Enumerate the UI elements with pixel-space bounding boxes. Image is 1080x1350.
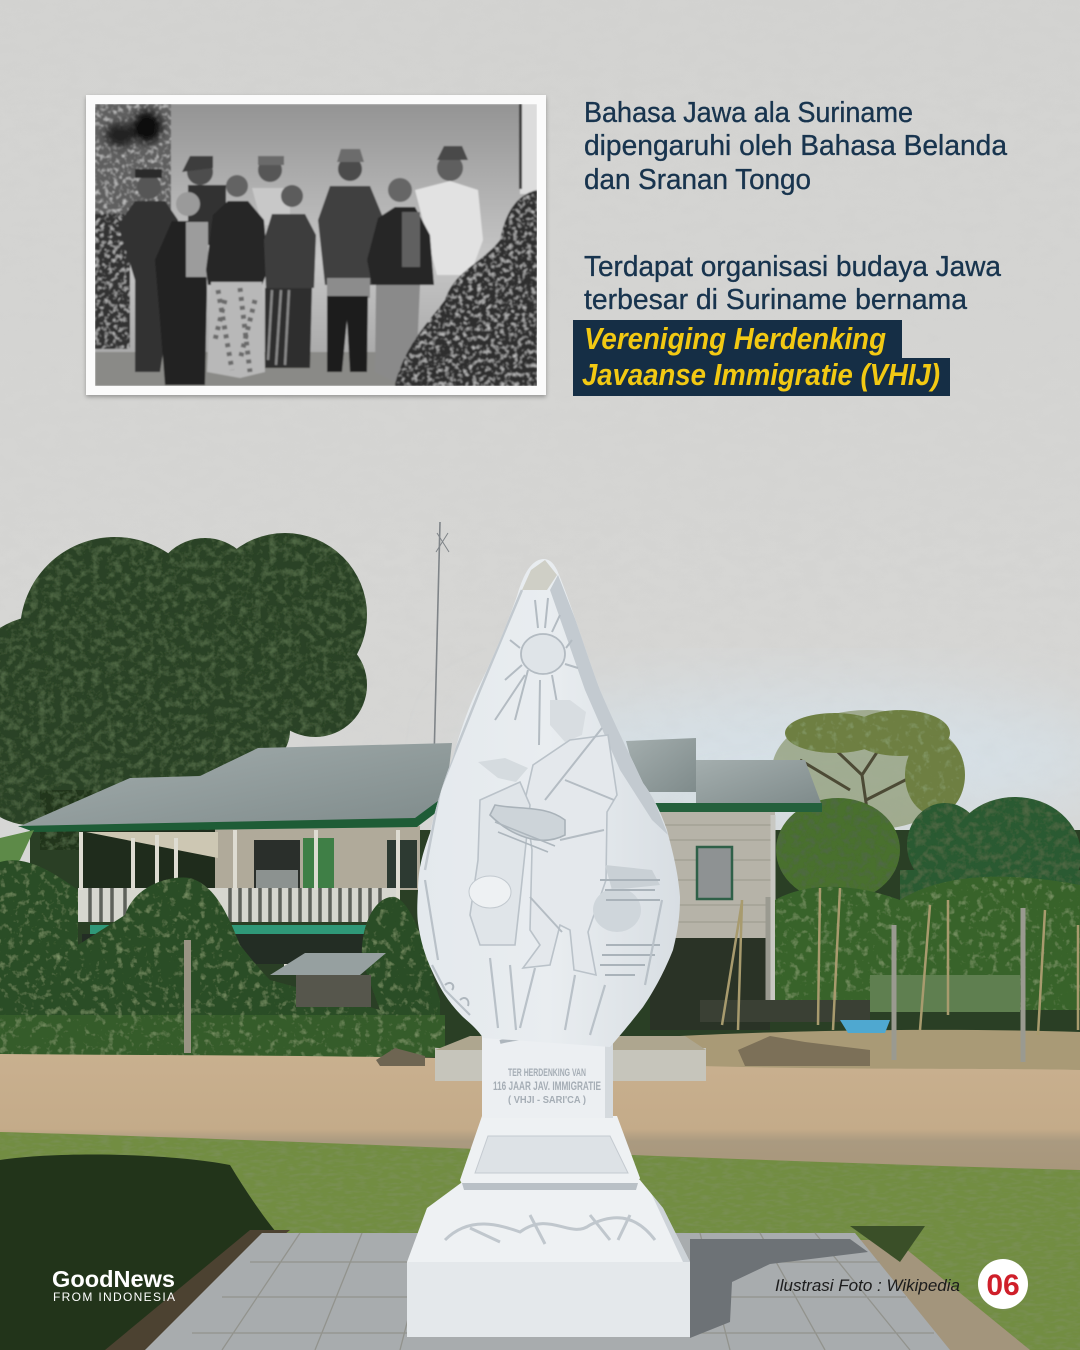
scene: tiled plinth: [145, 1233, 950, 1350]
monument: carved kayon stone: [407, 559, 690, 1337]
house: porch posts: [81, 830, 398, 968]
scene: papaya tree trunk: [184, 940, 191, 1053]
photo: woman with striped skirt: [264, 185, 316, 368]
garden: blue tub: [840, 1020, 890, 1033]
garden: dark under-house area: [650, 938, 770, 1030]
photo: studio backdrop: [95, 104, 526, 353]
page number badge: 06: [986, 1269, 1020, 1302]
text block: Javanese in Suriname: Bahasa Jawa ala Suriname: [584, 97, 913, 129]
plinth: cast shadow of the monument: [690, 1239, 868, 1338]
lawn: dark shade on the left: [0, 1155, 276, 1350]
lawn: gravel edge right: [850, 1240, 1030, 1350]
garden: dark fence band: [700, 1000, 870, 1022]
scene: small outbuilding: [270, 953, 386, 1007]
house: right wing wall: [650, 805, 775, 940]
garden: tilled soil: [680, 1030, 1080, 1070]
scene: dirt road: [0, 1054, 1080, 1175]
text block: Javanese in Suriname: [584, 97, 1008, 196]
logo: GoodNews from Indonesia: FROM INDONESIA: [53, 1290, 175, 1304]
relief: male figure: [523, 700, 617, 975]
house: right wing roof: [626, 738, 822, 812]
house: porch dark open area: [80, 830, 220, 890]
photo credit: Ilustrasi Foto : Wikipedia: [775, 1276, 960, 1295]
scene: dark backing behind the house and gardens: [30, 830, 1080, 1060]
garden: grey fence posts: [768, 897, 1023, 1062]
relief: female figure with basket: [469, 758, 565, 945]
monument: inscription block: TER HERDENKING VAN: [508, 1067, 586, 1079]
house: main roof: [18, 743, 452, 827]
photo: man with jacket: [318, 149, 382, 372]
highlight: organisation name: [573, 320, 950, 396]
photo: pole and window at right: [519, 104, 537, 194]
scene: olive tree with open branches on the right: [772, 710, 965, 830]
relief: ship and waves: [593, 865, 660, 975]
scene: antenna mast: [433, 522, 449, 800]
scene: vegetation in front of the house, left: [0, 860, 445, 1057]
scene: dark green trees on the right: [776, 797, 1080, 930]
text block: largest Javanese organisation: Terdapat organisasi budaya Jawa: [584, 251, 1002, 283]
monument: middle tier: [460, 1116, 640, 1190]
lawn: shadow near the paving: [850, 1226, 925, 1262]
photo: woman on the right: [367, 178, 435, 352]
photo: woman with batik skirt: [206, 175, 268, 378]
house: green gutter: [18, 795, 446, 832]
house: balustrade: [78, 888, 400, 922]
house: drain pipe: [770, 815, 776, 1000]
house: right wing window: [697, 847, 732, 899]
relief: border and shaded right edge: [425, 560, 668, 870]
scene: banana leaf on far left: [0, 830, 34, 870]
photo: man back left: [182, 156, 226, 245]
monument: relief carving: [425, 560, 668, 1035]
house: dark under-floor: [82, 934, 402, 964]
monument: inscription block: 116 JAAR JAV. IMMIGRATIE: [493, 1079, 601, 1093]
scene: wooden house: [18, 738, 822, 1000]
photo: woman in dark jacket: [155, 192, 208, 385]
scene: garden on the right: [650, 877, 1080, 1070]
highlight: organisation name: Javaanse Immigratie (VHIJ): [582, 357, 940, 392]
scene: lawn: [0, 1132, 1080, 1350]
photo: man far left: [118, 169, 178, 372]
monument: inscription block: [482, 1036, 613, 1118]
monument: inscription block: ( VHJI - SARI'CA ): [508, 1095, 586, 1106]
house: teal floor band: [90, 925, 375, 934]
photo: ground: [95, 352, 396, 386]
monument: floral relief on base: [445, 1215, 655, 1244]
garden: bamboo poles: [722, 888, 1078, 1035]
house: porch window and green door: [254, 838, 417, 888]
lawn: gravel edge left: [105, 1230, 290, 1350]
text block: Javanese in Suriname: dan Sranan Tongo: [584, 164, 811, 196]
scene: trees behind the house on the left: [0, 533, 367, 850]
photo: woman back center: [252, 156, 290, 225]
garden: lit vegetable field: [870, 975, 1020, 1012]
photo: framed archival portrait: [86, 95, 546, 395]
relief: sun: [495, 598, 578, 745]
monument: lower base block: [407, 1180, 690, 1337]
text block: largest Javanese organisation: terbesar di Suriname bernama: [584, 284, 968, 316]
house: porch wall: [215, 826, 420, 890]
logo: GoodNews from Indonesia: [52, 1266, 175, 1304]
logo: GoodNews from Indonesia: GoodNews: [52, 1266, 175, 1292]
scene: concrete slab behind the monument: [435, 1036, 706, 1081]
photo: plants at left: [95, 104, 171, 349]
photo: man in white shirt: [415, 146, 483, 275]
monument: pointed leaf body: [417, 559, 680, 1047]
text block: largest Javanese organisation: [584, 251, 1002, 316]
relief: globe cracks and scrolls: [425, 880, 662, 1035]
photo: dark blot: [105, 111, 162, 147]
highlight: organisation name: Vereniging Herdenking: [584, 321, 886, 356]
page number badge: [978, 1259, 1028, 1309]
text block: Javanese in Suriname: dipengaruhi oleh Bahasa Belanda: [584, 130, 1008, 162]
photo: bush at right: [395, 190, 537, 386]
scene: rocks: [376, 1036, 870, 1066]
garden: dense bushes: [775, 877, 1080, 1010]
